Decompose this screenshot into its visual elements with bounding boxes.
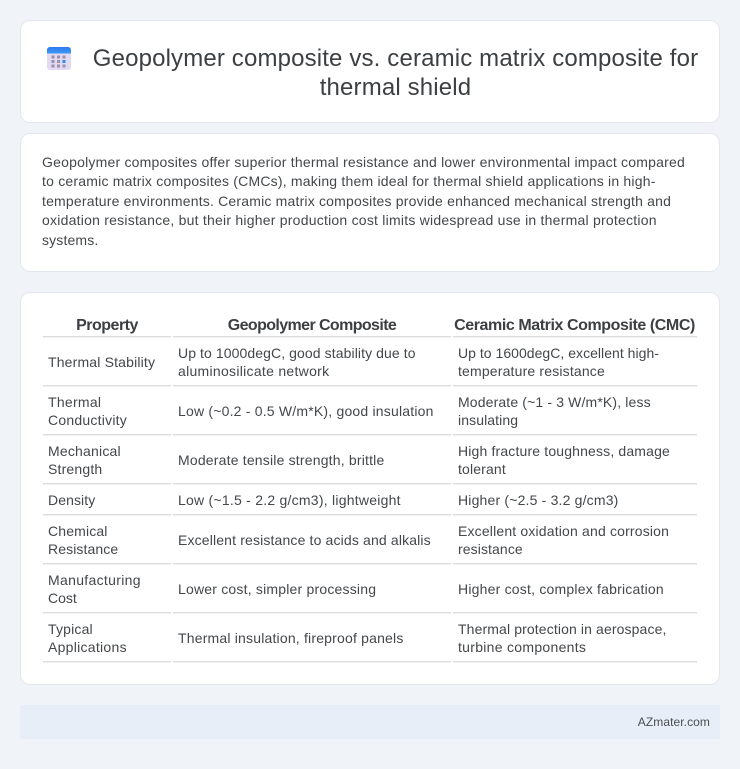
table rows: Higher (~2.5 - 3.2 g/cm3)	[458, 492, 619, 508]
table rows: Up to 1600degC, excellent high-	[458, 345, 659, 361]
table rows: Mechanical	[48, 443, 121, 459]
table rows: Cost	[48, 590, 77, 606]
summary text: Geopolymer composites offer superior thermal resistance and lower environmental impact compared	[42, 154, 685, 170]
table rows: High fracture toughness, damage	[458, 443, 670, 459]
panel: title card	[20, 20, 720, 123]
table header: Property	[76, 317, 138, 334]
title: thermal shield	[320, 74, 471, 101]
table rows: Density	[48, 492, 95, 508]
table rows	[43, 336, 697, 663]
table rows: temperature resistance	[458, 363, 605, 379]
table rows: Applications	[48, 639, 127, 655]
title: Geopolymer composite vs. ceramic matrix composite for	[93, 45, 698, 72]
table rows: resistance	[458, 541, 523, 557]
table rows: Thermal Stability	[48, 354, 155, 370]
panel: comparison table	[20, 292, 720, 685]
table rows: Thermal protection in aerospace,	[458, 621, 667, 637]
table rows: Strength	[48, 461, 102, 477]
summary text: to ceramic matrix composites (CMCs), making them ideal for thermal shield applications in high-	[42, 173, 656, 189]
table rows: Excellent oxidation and corrosion	[458, 523, 669, 539]
table rows: Conductivity	[48, 412, 127, 428]
panel: summary	[20, 133, 720, 272]
table rows: Low (~1.5 - 2.2 g/cm3), lightweight	[178, 492, 401, 508]
table rows: Manufacturing	[48, 572, 141, 588]
footer bar	[20, 705, 720, 739]
table rows: Lower cost, simpler processing	[178, 581, 376, 597]
summary text: temperature environments. Ceramic matrix composites provide enhanced mechanical strength and	[42, 193, 671, 209]
table rows: Typical	[48, 621, 93, 637]
table rows: aluminosilicate network	[178, 363, 329, 379]
icon: calendar	[47, 47, 71, 70]
table rows: Up to 1000degC, good stability due to	[178, 345, 416, 361]
table header	[76, 317, 695, 334]
table header: Geopolymer Composite	[228, 317, 396, 334]
summary text	[42, 154, 685, 248]
table rows: tolerant	[458, 461, 506, 477]
table header: Ceramic Matrix Composite (CMC)	[454, 317, 695, 334]
table rows: Higher cost, complex fabrication	[458, 581, 664, 597]
table rows: Thermal insulation, fireproof panels	[178, 630, 404, 646]
table rows: Thermal	[48, 394, 101, 410]
table rows: Low (~0.2 - 0.5 W/m*K), good insulation	[178, 403, 434, 419]
table rows: turbine components	[458, 639, 586, 655]
footer brand: AZmater.com	[638, 715, 710, 729]
table rows: Moderate (~1 - 3 W/m*K), less	[458, 394, 651, 410]
title	[93, 45, 698, 101]
table rows: Chemical	[48, 523, 108, 539]
table rows: Resistance	[48, 541, 118, 557]
summary text: systems.	[42, 232, 98, 248]
summary text: oxidation resistance, but their higher production cost limits widespread use in thermal protection	[42, 212, 657, 228]
table rows: insulating	[458, 412, 518, 428]
table rows: Moderate tensile strength, brittle	[178, 452, 384, 468]
table rows: Excellent resistance to acids and alkalis	[178, 532, 431, 548]
